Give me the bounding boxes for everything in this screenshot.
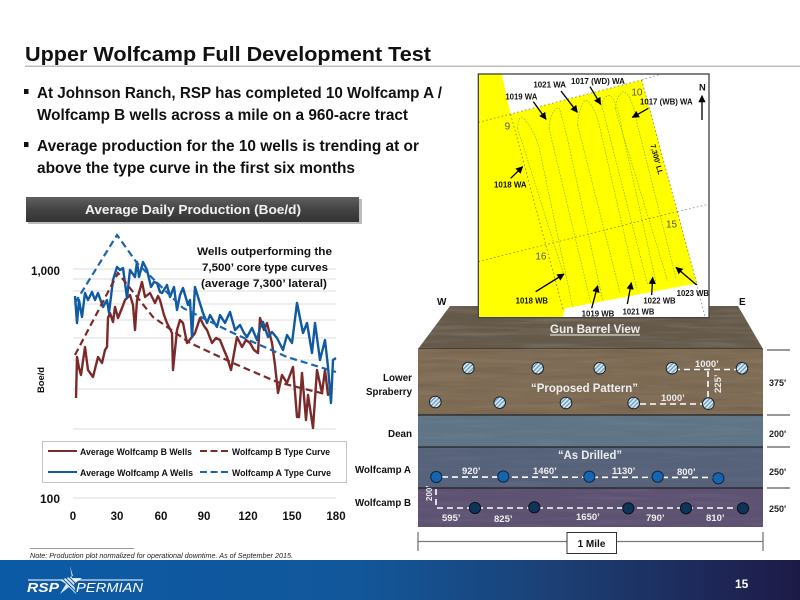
formation labels: Lower: [383, 373, 412, 384]
well labels: 1022 WB: [643, 295, 676, 305]
as drilled pattern: 200’: [425, 485, 434, 501]
heading: gun barrel view: Gun Barrel View: [550, 324, 640, 336]
logo: PERMIAN: [76, 581, 144, 595]
compass: west and east: E: [739, 297, 746, 308]
north arrow: N: [699, 83, 706, 93]
bullet list: At Johnson Ranch, RSP has completed 10 Wolfcamp A /: [37, 85, 443, 102]
y axis labels: 1,000: [31, 266, 60, 278]
well labels: 7,300' LL: [648, 143, 665, 176]
well labels: 1019 WA: [505, 91, 537, 101]
chart legend: [42, 442, 346, 482]
x axis labels: 0: [70, 511, 76, 523]
footer band: [0, 560, 800, 600]
well labels: 1021 WA: [533, 80, 566, 90]
thickness labels: 250': [769, 504, 786, 514]
surface block: [418, 306, 763, 349]
chart annotation: [197, 246, 332, 290]
gun barrel cross-section: [355, 297, 790, 554]
chart legend: Wolfcamp B Type Curve: [232, 447, 330, 457]
well labels: 1017 (WD) WA: [571, 76, 625, 86]
series: Wolfcamp B type curve: [75, 273, 329, 395]
well location map: [478, 74, 709, 318]
chart header bar: [26, 197, 362, 224]
formation labels: Dean: [388, 429, 412, 440]
x axis labels: 60: [155, 511, 167, 523]
line chart: average daily production: [31, 235, 346, 523]
proposed pattern: 225’: [713, 374, 724, 393]
as drilled pattern: 810’: [706, 513, 724, 524]
bullet list: above the type curve in the first six months: [37, 160, 355, 177]
as drilled pattern: 1460’: [533, 466, 557, 477]
horizontal well paths: [518, 92, 676, 307]
as drilled pattern: 825’: [494, 514, 512, 525]
thickness labels: 375': [769, 378, 786, 388]
as drilled pattern: [425, 448, 749, 525]
formation labels: [355, 373, 412, 509]
section numbers: [505, 88, 678, 262]
compass: west and east: W: [437, 297, 447, 308]
well labels: 1018 WA: [494, 179, 527, 189]
as drilled pattern: 1130’: [612, 466, 635, 477]
logo: RSP: [27, 580, 59, 595]
series: average Wolfcamp B wells: [76, 282, 328, 428]
one mile scale: [418, 532, 763, 554]
bullet list: Wolfcamp B wells across a mile on a 960-acre tract: [37, 107, 408, 124]
north arrow: [699, 83, 706, 120]
formation labels: Wolfcamp B: [355, 498, 411, 509]
layer: Wolfcamp A: [418, 447, 763, 488]
series: average Wolfcamp A wells: [75, 262, 336, 403]
thickness labels: 200': [769, 429, 786, 439]
well labels: 1018 WB: [516, 295, 548, 305]
proposed pattern: 1000’: [661, 393, 685, 404]
well labels: 1017 (WB) WA: [640, 96, 693, 106]
y axis labels: Boe/d: [36, 367, 47, 393]
x axis labels: 150: [282, 511, 302, 523]
chart annotation: 7,500’ core type curves: [202, 262, 328, 274]
x axis labels: [70, 511, 346, 523]
x axis labels: 120: [238, 511, 258, 523]
formation labels: Wolfcamp A: [355, 465, 411, 476]
well labels: 1019 WB: [582, 308, 614, 318]
chart header bar: Average Daily Production (Boe/d): [85, 203, 301, 217]
well labels: 1021 WB: [623, 307, 654, 317]
section lines: [478, 80, 697, 310]
logo: [27, 566, 144, 596]
as drilled pattern: 920’: [462, 466, 480, 477]
page number: 15: [735, 577, 749, 591]
proposed pattern: “Proposed Pattern”: [531, 381, 638, 395]
label arrows: [511, 87, 697, 308]
layer: Lower Spraberry: [418, 349, 763, 415]
x axis labels: 30: [111, 511, 123, 523]
formation labels: Spraberry: [366, 387, 412, 398]
as drilled pattern: 1650’: [576, 512, 600, 523]
one mile scale: 1 Mile: [578, 539, 606, 550]
series: Wolfcamp A type curve: [75, 235, 336, 372]
well labels: [494, 76, 709, 318]
proposed pattern: [430, 359, 748, 410]
bullet list: Average production for the 10 wells is trending at or: [37, 138, 419, 155]
acreage polygon: [478, 74, 697, 318]
as drilled pattern: “As Drilled”: [558, 448, 622, 462]
section numbers: 10: [631, 88, 643, 99]
as drilled pattern: 800’: [677, 467, 696, 478]
as drilled pattern: 790’: [646, 513, 664, 524]
thickness labels: [767, 350, 790, 514]
footnote: Note: Production plot normalized for operational downtime. As of September 2015.: [30, 553, 293, 560]
section numbers: 15: [666, 219, 678, 230]
as drilled pattern: 595’: [442, 513, 460, 524]
chart annotation: (average 7,300’ lateral): [201, 278, 327, 290]
section numbers: 9: [505, 122, 511, 133]
well labels: 1023 WB: [677, 288, 709, 298]
chart legend: Average Wolfcamp B Wells: [80, 447, 192, 457]
compass: west and east: [437, 297, 746, 308]
chart annotation: Wells outperforming the: [197, 246, 332, 258]
layer: Dean: [418, 415, 763, 447]
x axis labels: 180: [326, 511, 346, 523]
layer: Wolfcamp B: [418, 488, 763, 527]
y axis labels: [31, 266, 60, 506]
bullet list: [24, 85, 443, 177]
chart legend: Average Wolfcamp A Wells: [80, 468, 193, 478]
x axis labels: 90: [198, 511, 210, 523]
proposed pattern: 1000’: [695, 359, 719, 370]
section numbers: 16: [535, 251, 547, 262]
title: Upper Wolfcamp Full Development Test: [25, 43, 431, 66]
y axis labels: 100: [40, 494, 60, 506]
thickness labels: 250': [769, 467, 786, 477]
chart legend: Wolfcamp A Type Curve: [232, 468, 331, 478]
